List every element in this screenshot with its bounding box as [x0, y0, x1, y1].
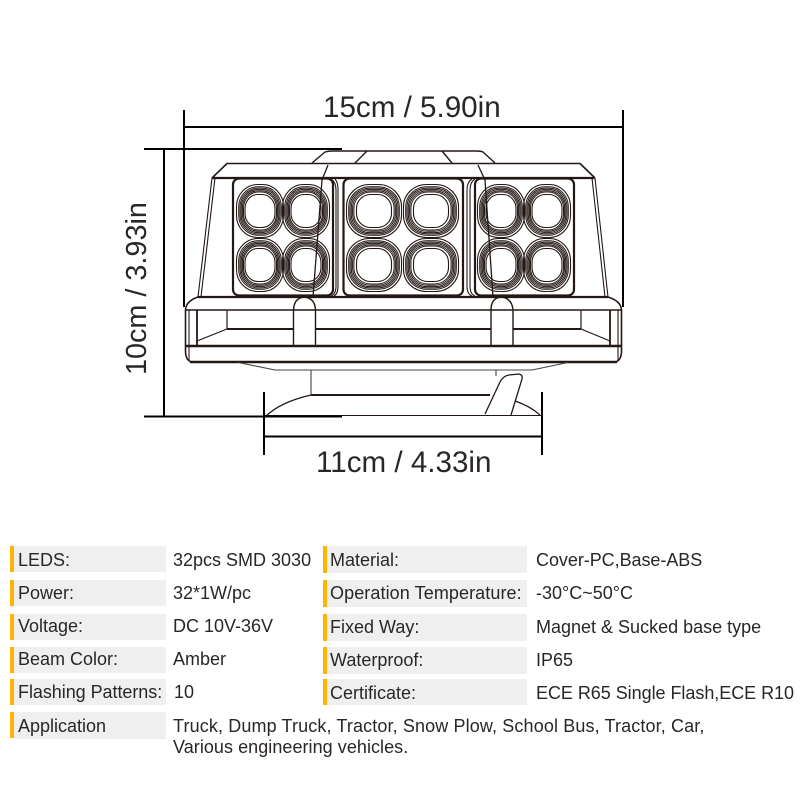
spec row: LEDS [10, 546, 311, 572]
top cap [312, 151, 495, 163]
spec row: Voltage: Voltage: [18, 616, 83, 636]
spec row: Certificate [323, 679, 794, 705]
spec row: Power [10, 580, 251, 606]
LED panel: right [467, 178, 574, 296]
spec row: Flashing Patterns: Flashing Patterns: [18, 682, 162, 702]
spec row: Fixed Way: Fixed Way: [330, 617, 419, 637]
spec row: Material [323, 546, 702, 573]
product line drawing: amber beacon [186, 151, 622, 417]
spec table [10, 546, 794, 757]
mounting clip: left [294, 297, 316, 345]
dimension: height: 10cm / 3.93in [121, 202, 153, 375]
spec row: Waterproof: Waterproof: [330, 650, 423, 670]
lower lens band [186, 297, 622, 362]
spec row: Operation Temperature: Operation Temperature: [330, 583, 522, 603]
spec row: Fixed Way: Magnet & Sucked base type [536, 617, 761, 637]
spec row: Application: Truck, Dump Truck, Tractor, Snow Plow, School Bus, Tractor, Car, [173, 716, 705, 736]
dimension: base width [264, 392, 542, 479]
spec row: Voltage: DC 10V-36V [173, 616, 273, 636]
spec row: Application: Application [18, 716, 106, 736]
LED panel: centre [344, 178, 463, 296]
spec row: Application: Various engineering vehicles. [173, 737, 408, 757]
mounting clip: right [491, 297, 513, 345]
spec row: Application [10, 712, 705, 757]
cover seam lines [313, 165, 493, 297]
spec row: Power: 32*1W/pc [173, 583, 251, 603]
upper housing [198, 164, 608, 297]
spec row: Beam Color: Amber [173, 649, 226, 669]
spec row: Fixed Way [323, 614, 761, 641]
spec row: Operation Temperature [323, 580, 633, 607]
LED panel: left [233, 178, 338, 296]
stem and base [238, 362, 568, 417]
spec row: Waterproof [323, 647, 573, 674]
dimension: height [121, 149, 342, 416]
spec row: Waterproof: IP65 [536, 650, 573, 670]
spec row: Flashing Patterns: 10 [174, 682, 194, 702]
spec row: Power: Power: [18, 583, 74, 603]
suction lever [485, 374, 522, 415]
spec row: Certificate: ECE R65 Single Flash,ECE R10 [536, 683, 794, 703]
spec row: LEDS: 32pcs SMD 3030 [173, 550, 311, 570]
spec row: LEDS: LEDS: [18, 550, 70, 570]
spec row: Material: Material: [330, 550, 399, 570]
spec row: Flashing Patterns [10, 679, 194, 705]
dimension: width: 15cm / 5.90in [323, 91, 501, 124]
dimension: base width: 11cm / 4.33in [316, 446, 491, 479]
spec row: Certificate: Certificate: [330, 683, 416, 703]
spec row: Operation Temperature: -30°C~50°C [536, 583, 633, 603]
dimension: width [184, 91, 623, 307]
spec row: Material: Cover-PC,Base-ABS [536, 550, 702, 570]
spec row: Voltage [10, 614, 273, 640]
spec row: Beam Color [10, 647, 226, 673]
spec row: Beam Color: Beam Color: [18, 649, 118, 669]
